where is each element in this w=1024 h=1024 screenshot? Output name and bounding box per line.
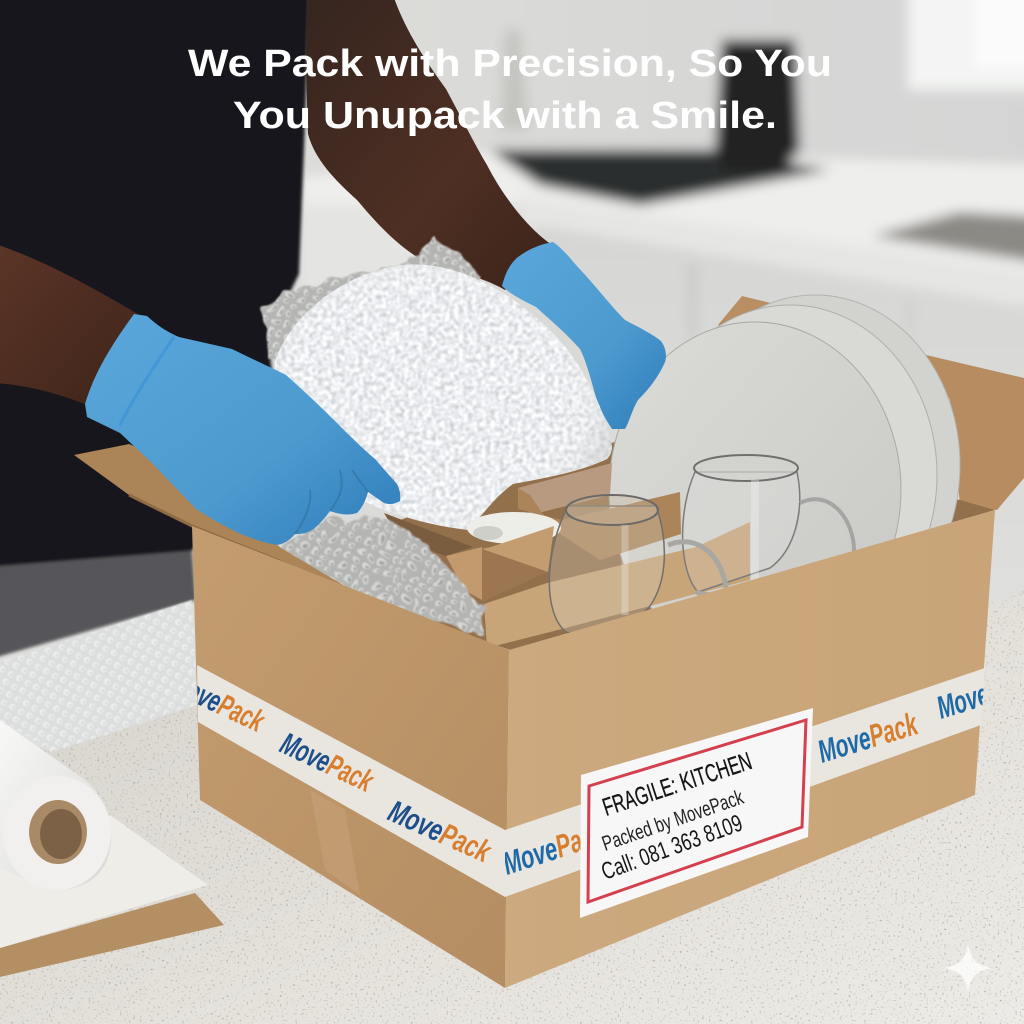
sink	[872, 212, 1024, 266]
cardboard sheet	[0, 893, 224, 977]
person torso in black shirt	[0, 0, 310, 662]
box right flap	[926, 355, 1024, 510]
label heading: FRAGILE: KITCHEN	[599, 747, 755, 822]
back glass mug	[683, 455, 854, 592]
cabinets	[540, 225, 1024, 620]
tape logo 2: MovePack	[275, 726, 380, 799]
rear divider cell	[518, 488, 681, 560]
cooktop	[490, 150, 830, 205]
bubble wrap around plate	[263, 240, 482, 365]
tape logo right: MovePack	[814, 705, 923, 770]
counter edge	[520, 195, 1024, 318]
tissue paper sheet	[0, 815, 208, 948]
foam paper roll	[0, 720, 111, 890]
box left face	[192, 526, 509, 988]
box right face	[505, 510, 995, 988]
plate 3	[670, 295, 960, 635]
box dividers and mug	[384, 488, 750, 648]
tape logo 3: MovePack	[383, 793, 497, 870]
plate 2	[643, 305, 937, 645]
label packed by: Packed by MovePack	[599, 786, 747, 856]
box interior	[380, 440, 995, 650]
right face packing tape	[505, 668, 985, 897]
box left flap	[74, 444, 509, 652]
left forearm	[0, 244, 145, 406]
window	[908, 0, 1024, 90]
title line 1: We Pack with Precision, So You	[188, 43, 832, 85]
back roll of bubble wrap	[0, 600, 197, 752]
front divider	[484, 522, 750, 648]
bubble-wrapped plate	[274, 264, 612, 530]
label phone: Call: 081 363 8109	[598, 810, 746, 886]
front glass mug	[549, 495, 726, 634]
stack of white plates	[609, 295, 960, 658]
right glove	[502, 242, 666, 429]
title line 2: You Unupack with a Smile.	[233, 95, 777, 137]
black kettle	[715, 40, 800, 172]
left glove	[85, 314, 400, 545]
plate 1	[609, 322, 901, 658]
white mug	[467, 512, 561, 544]
counter top	[300, 150, 1024, 310]
left face packing tape	[166, 665, 505, 897]
faucet shadow	[500, 30, 530, 130]
tape logo 1: MovePack	[166, 666, 271, 739]
box back flap	[718, 296, 800, 340]
wrap over cardboard	[518, 463, 612, 515]
icon: sparkle watermark	[944, 944, 992, 992]
tape logo front: MovePack	[498, 814, 611, 882]
crumpled bubble wrap in box	[281, 518, 484, 636]
title	[188, 43, 832, 137]
fragile shipping label	[580, 708, 813, 918]
right forearm	[306, 0, 552, 290]
counter surface	[0, 590, 1024, 1024]
